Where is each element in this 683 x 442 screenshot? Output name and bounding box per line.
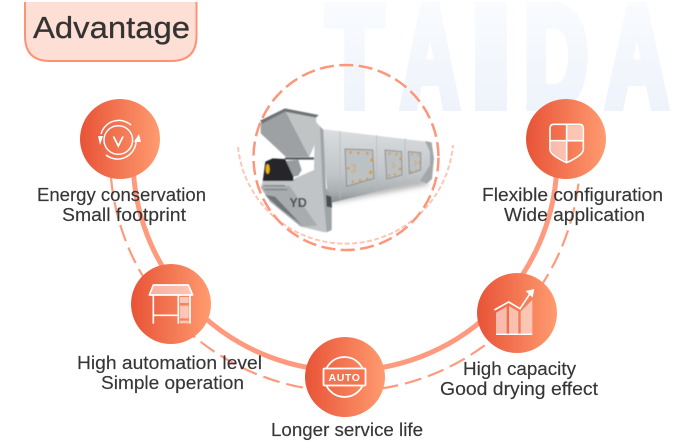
product image: drum machine: YD (289, 196, 307, 210)
icon: rising chart (477, 273, 557, 353)
product image: drum machine (260, 108, 434, 232)
label: High capacity (463, 359, 576, 379)
label: Good drying effect (440, 379, 598, 399)
icon: shield (526, 99, 606, 179)
title badge: Advantage: Advantage (33, 10, 190, 45)
light dashed arc around product (238, 145, 453, 244)
item: energy conservation (37, 99, 206, 225)
label: High automation level (77, 353, 262, 373)
label: Small footprint (62, 205, 186, 225)
label (37, 185, 206, 225)
label: Flexible configuration (482, 185, 663, 205)
item: longer service life (271, 337, 423, 440)
label: Simple operation (101, 373, 244, 393)
icon: machine desk (131, 264, 211, 344)
label: Longer service life (271, 420, 423, 440)
label (482, 185, 663, 225)
label: Energy conservation (37, 185, 206, 205)
icon: energy cycle (80, 99, 160, 179)
item: flexible configuration (482, 99, 663, 225)
solid connecting arc (133, 170, 557, 371)
label (77, 353, 262, 393)
title badge: Advantage (25, 2, 196, 61)
item: high capacity (440, 273, 598, 399)
label (440, 359, 598, 399)
watermark: TAIDA (326, 0, 668, 136)
item: high automation level (77, 264, 262, 393)
dashed ring around product (254, 65, 438, 250)
icon: AUTO badge: AUTO (329, 372, 360, 384)
icon: AUTO badge (305, 337, 385, 417)
dashed connecting arc (111, 178, 579, 391)
label: Wide application (504, 205, 645, 225)
